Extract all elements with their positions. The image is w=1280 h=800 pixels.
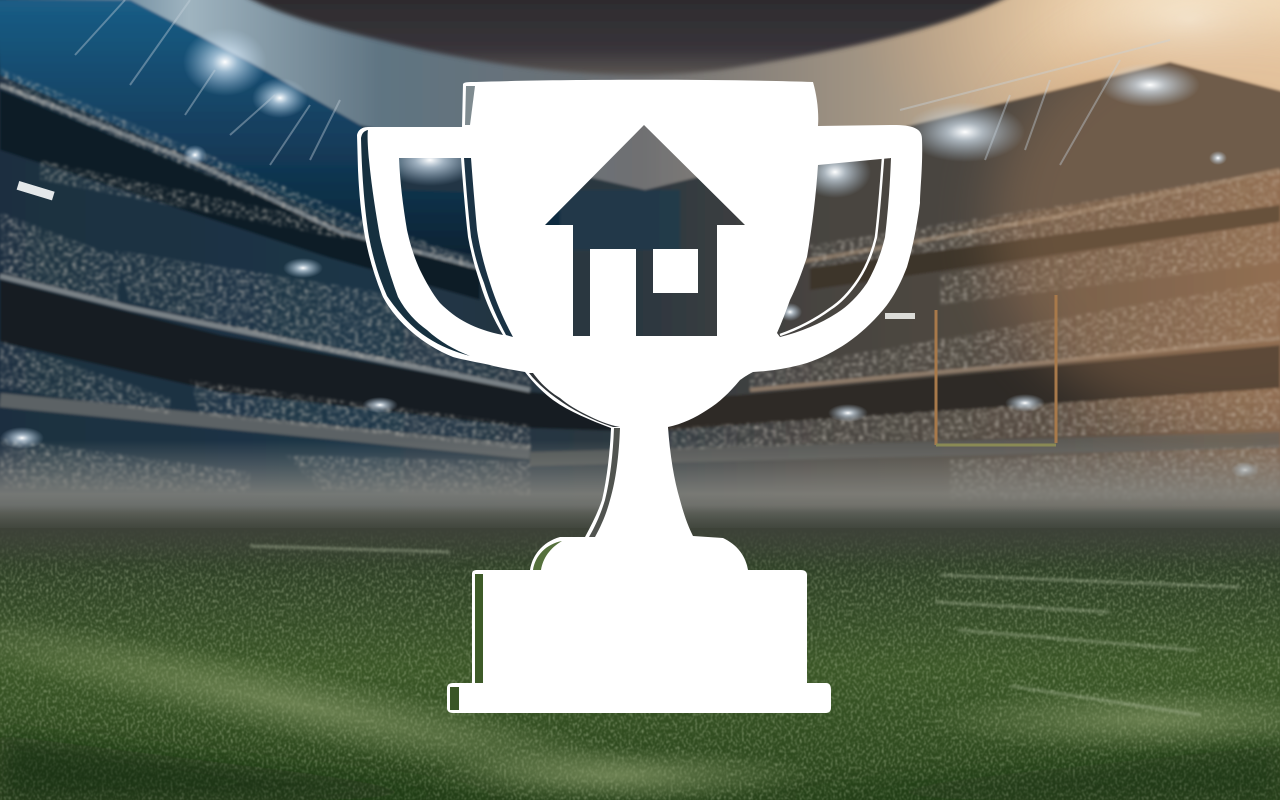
bowl side gap: [464, 158, 513, 337]
left second tier line: [0, 276, 530, 390]
crowd texture: [0, 68, 1280, 493]
bowl lower gap: [529, 373, 620, 427]
background: sky: [0, 0, 1280, 215]
left dark band: [0, 90, 480, 300]
stadium base: [0, 0, 1280, 510]
goal post: [936, 295, 1056, 445]
trophy icon: [357, 80, 922, 713]
dome gap: [533, 541, 562, 570]
right handle thin line: [780, 158, 883, 335]
grass field: [0, 505, 1280, 800]
right second tier line: [750, 338, 1280, 390]
dark grass shadow right: [760, 745, 1280, 800]
background: sun glow: [850, 0, 1280, 190]
stem gap: [589, 428, 620, 537]
left roof underside: [0, 0, 560, 255]
center far tier blue: [470, 190, 680, 250]
fog layer: [0, 440, 1280, 530]
right upper roof: [830, 62, 1280, 245]
right side warm light haze: [990, 10, 1280, 430]
right lower dark band: [650, 345, 1280, 432]
field yard lines: [250, 546, 1240, 715]
pedestal gap: [475, 574, 483, 683]
left tier line: [0, 85, 480, 268]
right mid dark band: [810, 205, 1280, 290]
left second dark band: [0, 280, 650, 432]
floodlights: [0, 28, 1259, 478]
left scoreboard sign: [17, 181, 55, 200]
dark storm cloud: [235, 0, 1020, 75]
house window: [653, 249, 698, 293]
lower concourse: [530, 432, 1280, 466]
light truss lines: [75, 0, 1170, 165]
trophy main silhouette with holes: [357, 80, 922, 713]
left bottom tier: [0, 400, 530, 452]
turf fade at horizon: [0, 528, 1280, 578]
dark grass shadow: [0, 735, 520, 800]
field sheen: [0, 578, 729, 800]
right tier line: [800, 170, 1280, 262]
plate gap: [450, 687, 459, 710]
left handle gap: [361, 130, 470, 356]
bowl top gap: [465, 86, 475, 125]
right scoreboard sign: [885, 313, 915, 319]
background: stadium painted layers: [0, 0, 1280, 510]
